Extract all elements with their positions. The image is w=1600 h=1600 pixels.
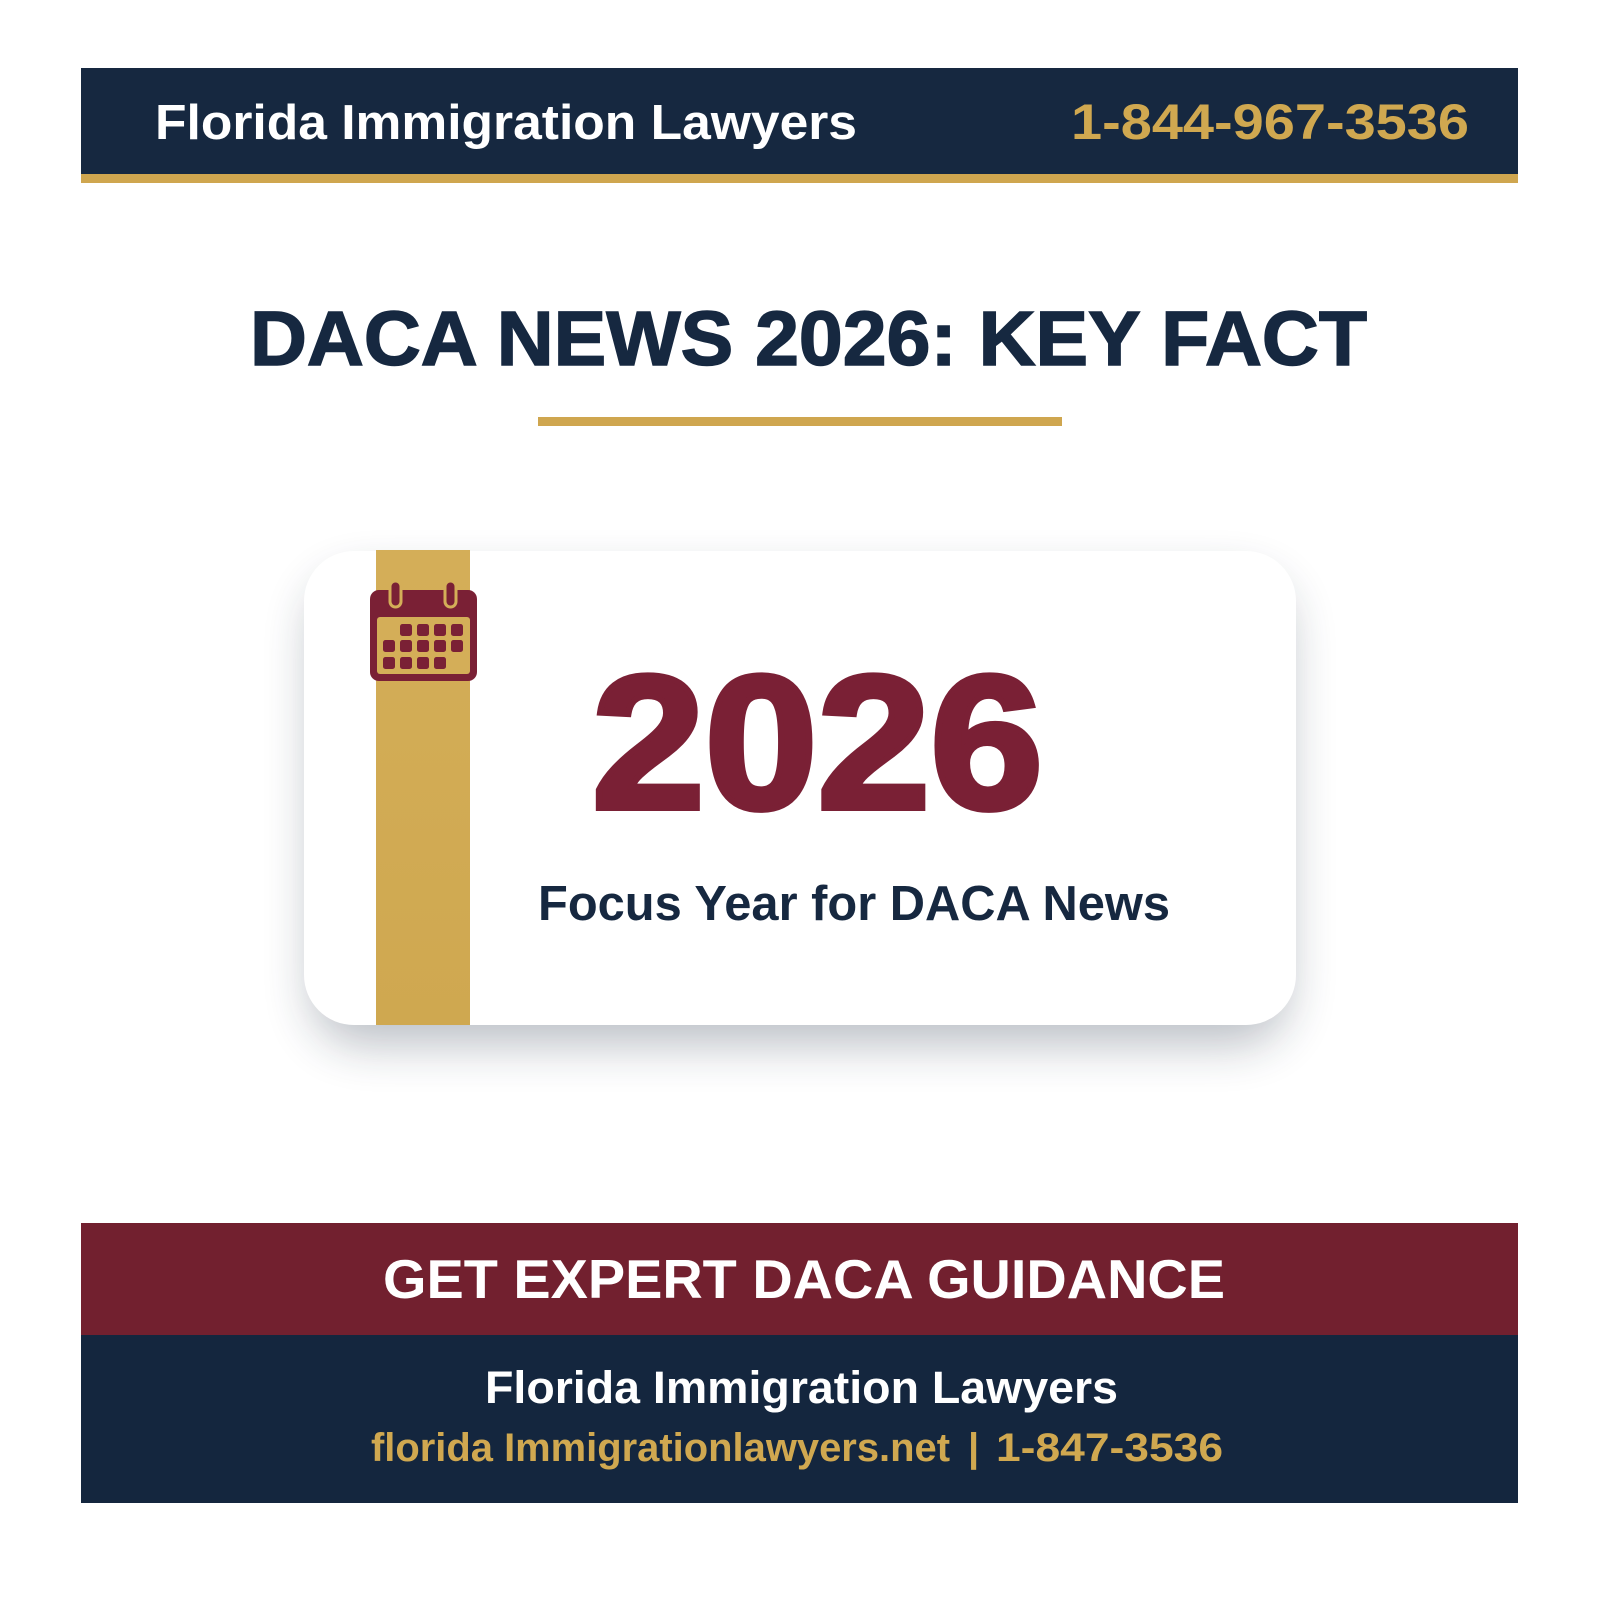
footer separator: | — [968, 1426, 979, 1470]
call to action banner — [81, 1223, 1518, 1336]
header phone number: 1-844-967-3536 — [1071, 94, 1469, 150]
footer firm name: Florida Immigration Lawyers — [485, 1362, 1118, 1413]
header firm name: Florida Immigration Lawyers — [155, 96, 857, 150]
card caption: Focus Year for DACA News — [538, 877, 1170, 931]
footer website: florida Immigrationlawyers.net — [371, 1426, 950, 1470]
header banner — [81, 68, 1518, 183]
footer contact panel — [81, 1335, 1518, 1503]
title: DACA NEWS 2026: KEY FACT — [250, 296, 1367, 382]
call to action text: GET EXPERT DACA GUIDANCE — [383, 1248, 1225, 1310]
icon: calendar — [370, 581, 477, 681]
panel: key fact card — [304, 550, 1296, 1044]
gold vertical band — [376, 550, 470, 1025]
footer phone: 1-847-3536 — [996, 1426, 1223, 1470]
big year figure: 2026 — [592, 637, 1043, 849]
title underline — [538, 417, 1062, 426]
